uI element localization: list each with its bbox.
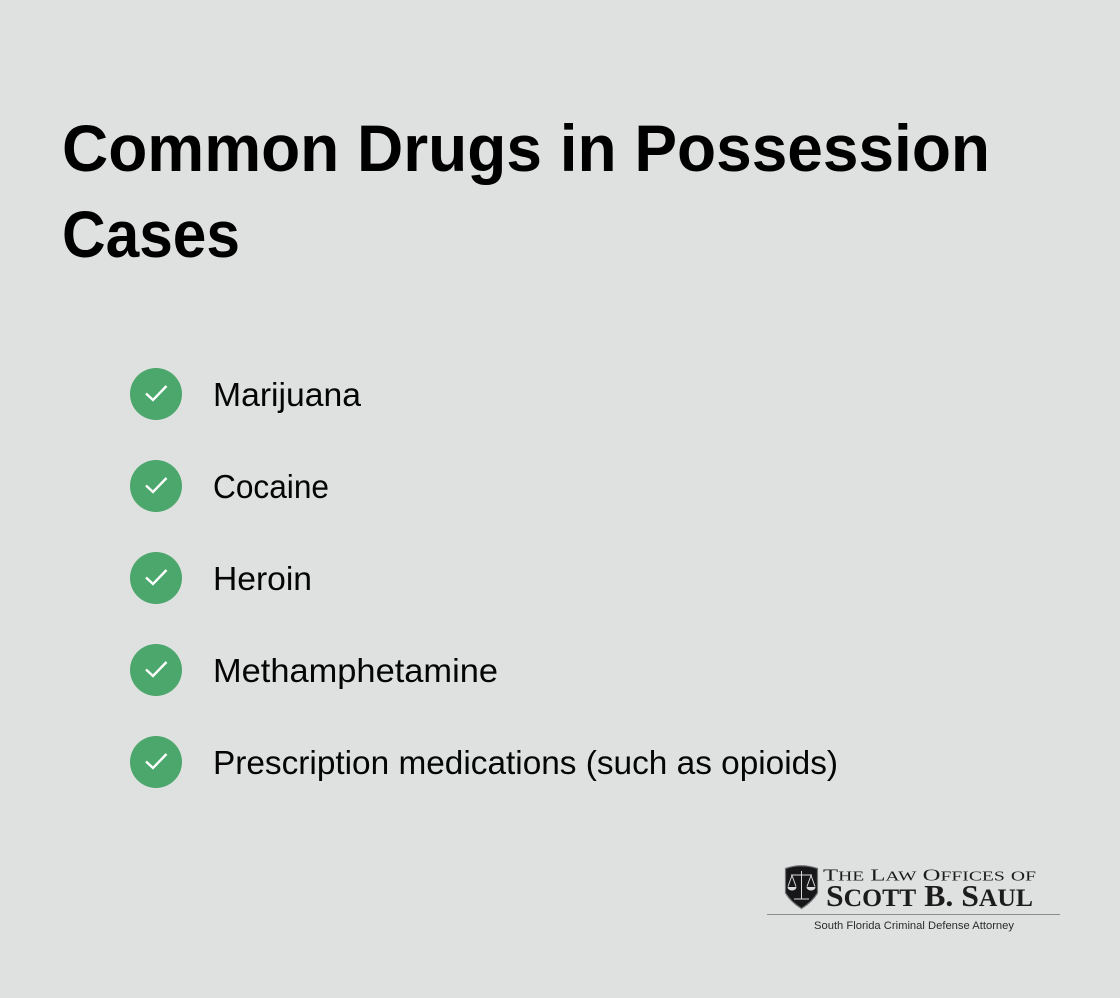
logo firm line: T HE L AW O FFICES OF [823,866,1037,884]
logo tagline: South Florida Criminal Defense Attorney [814,920,1015,932]
list item: Heroin [130,552,312,604]
list item: Cocaine [130,460,329,512]
list item: Marijuana: Marijuana [213,376,362,413]
list item: Marijuana [130,368,362,420]
title [62,111,990,271]
checklist [130,368,838,788]
list item: Prescription medications: Prescription medications (such as opioids) [213,744,838,781]
list item: Methamphetamine [130,644,498,696]
list item: Methamphetamine: Methamphetamine [213,652,498,689]
icon: shield with scales [786,866,818,908]
title: Cases [62,197,240,271]
title: Common Drugs in Possession [62,111,990,185]
list item: Heroin: Heroin [213,560,312,597]
list item: Cocaine: Cocaine [213,468,329,505]
logo: The Law Offices of Scott B. Saul [767,866,1060,932]
logo name: SCOTT B. SAUL [826,878,1033,913]
list item: Prescription medications [130,736,838,788]
